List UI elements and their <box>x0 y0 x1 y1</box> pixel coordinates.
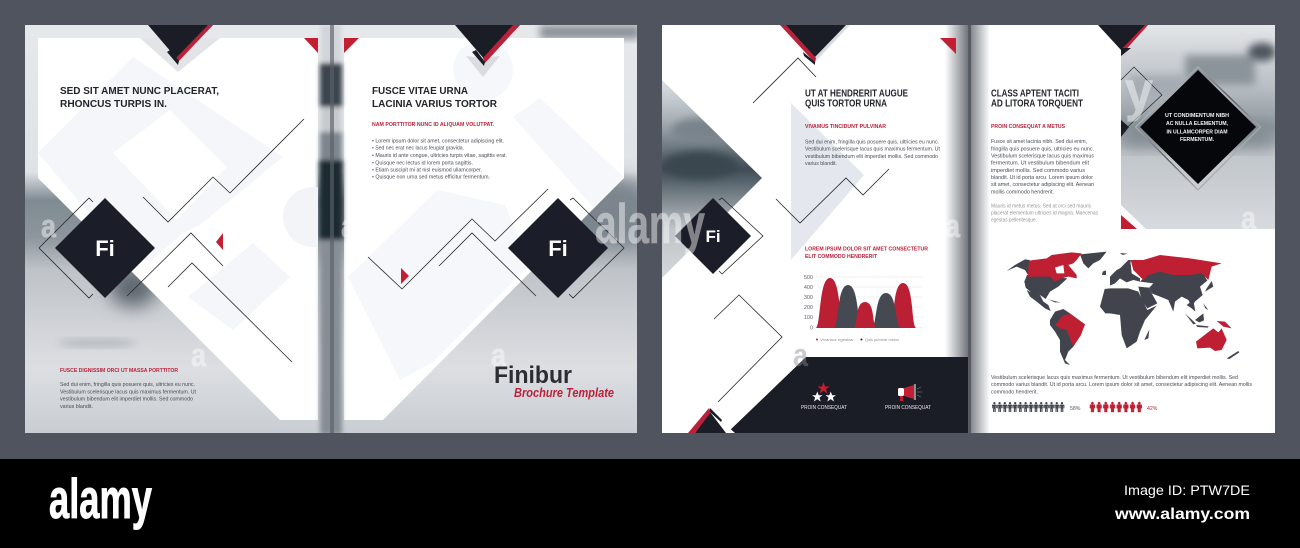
page 4 callout diamond <box>1136 67 1260 190</box>
page 1 body text <box>60 382 197 410</box>
page 3 heading <box>805 88 908 110</box>
page 3 top chevron tab <box>780 25 850 65</box>
photo edge diamond <box>1121 120 1129 137</box>
page 3 body text: varius blandit. <box>805 161 837 167</box>
page 4 small outline diamond <box>1121 67 1162 133</box>
panel: front page white sheet <box>38 38 318 420</box>
pale geometric shapes: back page <box>348 40 624 380</box>
chart title: LOREM IPSUM DOLOR SIT AMET CONSECTETUR <box>805 247 928 253</box>
page 1 small red triangle <box>216 233 223 250</box>
area chart: 0 <box>810 326 813 332</box>
panel: cover spread background photo <box>25 25 640 433</box>
watermark letters: alamy <box>595 192 705 255</box>
page 2 bullet list: • Etiam suscipit mi at nisl euismod ullamcorper. <box>372 167 482 173</box>
page 1 body text: Sed dui enim, fringilla quis posuere quis, ultricies eu nunc. <box>60 382 195 388</box>
area chart: 100 <box>804 315 813 321</box>
area chart: 200 <box>804 305 813 311</box>
page 4 callout diamond: UT CONDIMENTUM NIBH <box>1165 113 1229 119</box>
page 3 heading: UT AT HENDRERIT AUGUE <box>805 88 908 100</box>
page 4 body text: blandit. Ut id porta arcu. Lorem ipsum dolor <box>991 175 1093 181</box>
page 1 subheading: FUSCE DIGNISSIM ORCI UT MASSA PORTTITOR <box>60 368 178 374</box>
area chart: 300 <box>804 295 813 301</box>
area chart: 400 <box>804 285 813 291</box>
map: europe africa asia oceania <box>1100 253 1239 359</box>
page 4 bottom text: commodo varius blandit. Ut id porta arcu. Lorem ipsum dolor sit amet, consectetur adipiscing elit. Aenean mollis <box>991 382 1252 388</box>
page 2 heading: LACINIA VARIUS TORTOR <box>372 98 497 110</box>
page 2 top chevron tab <box>455 25 520 77</box>
icon: megaphone <box>898 384 922 401</box>
page 3 heading: QUIS TORTOR URNA <box>805 98 887 110</box>
page 4 heading <box>991 88 1083 110</box>
page 2 decorative line charts <box>368 189 548 296</box>
page 4 spine shadow <box>968 25 990 433</box>
area chart <box>804 275 923 342</box>
watermark letters: a <box>1241 200 1256 236</box>
watermark letters: a <box>793 337 808 373</box>
page 1 body text: varius blandit. <box>60 404 93 410</box>
footer logo: alamy <box>49 467 152 530</box>
page 2 bullet list: • Lorem ipsum dolor sit amet, consectetur adipiscing elit. <box>372 139 504 145</box>
page 4 body text <box>991 139 1094 195</box>
page 4 heading: CLASS APTENT TACITI <box>991 88 1079 100</box>
page 1 decorative line charts <box>127 119 304 362</box>
watermark letters: y <box>1125 59 1153 122</box>
chart legend: Vivamus egestas <box>820 338 853 342</box>
page 4 heading: AD LITORA TORQUENT <box>991 98 1083 110</box>
page 4 body text: mollis commodo hendrerit. <box>991 189 1054 195</box>
page 4 bottom text: commodo hendrerit. <box>991 389 1038 395</box>
page 4 body text: sit amet, consectetur adipiscing elit. Aenean <box>991 182 1094 188</box>
page 2 bullet list: • Quisque nec lectus id lorem porta sagittis. <box>372 160 473 166</box>
page 4 secondary text: egestas pellentesque. <box>991 218 1037 224</box>
page 2 bullet list: • Mauris id ante congue, ultricies turpis vitae, sagittis erat. <box>372 153 507 159</box>
page 4 body text: imperdiet mollis. Sed commodo varius <box>991 168 1085 174</box>
pictogram: 42 percent <box>1090 402 1158 412</box>
page 4 secondary text <box>991 203 1098 224</box>
page 2 small red triangle <box>401 268 409 284</box>
page 4 top chevron tab <box>1098 25 1148 56</box>
page 1 top chevron tab <box>140 25 220 72</box>
area chart: 500 <box>804 275 813 281</box>
footer bar <box>0 459 1300 548</box>
page 3 pale triangle <box>791 103 864 260</box>
icon label: PROIN CONSEQUAT <box>801 405 848 411</box>
page 3 spine shadow <box>945 25 968 433</box>
page 4 bottom text: Vestibulum scelerisque lacus quis maximus fermentum. Ut vestibulum bibendum elit imperdiet mollis. Sed <box>991 375 1238 381</box>
page 3 subheading: VIVAMUS TINCIDUNT PULVINAR <box>805 124 886 130</box>
page 2 logo diamond: Fi <box>548 236 568 261</box>
pictogram: 42 percent: 42% <box>1147 406 1158 412</box>
chart legend: Quis pulvinar metus <box>865 338 899 342</box>
page 4 photo <box>1121 25 1276 229</box>
page 3 bottom dark banner <box>727 357 968 433</box>
page 3 corner red triangle <box>940 38 956 54</box>
pictogram: 58 percent <box>992 402 1081 412</box>
page 4 subheading: PROIN CONSEQUAT A METUS <box>991 124 1065 130</box>
watermark letters: a <box>341 208 356 244</box>
page 4 bottom text <box>991 375 1252 395</box>
page 4 secondary text: placerat elementum ultricies id magna. Maecenas <box>991 211 1098 217</box>
page 4 body text: Vestibulum scelerisque lacus quis maximus <box>991 153 1094 159</box>
page 3 body text <box>805 139 941 167</box>
icon: three stars <box>812 382 836 402</box>
page 4 body text: Fusce sit amet lacinia nibh. Sed dui enim, <box>991 139 1087 145</box>
icon label: PROIN CONSEQUAT <box>885 405 932 411</box>
page 1 heading: SED SIT AMET NUNC PLACERAT, <box>60 85 219 97</box>
chart title: ELIT COMMODO HENDRERIT <box>805 254 878 260</box>
page 2 bullet list <box>372 139 507 180</box>
watermark letters: a <box>41 208 56 244</box>
page 3 decorative line charts <box>714 58 889 402</box>
page 1 logo diamond <box>39 198 155 298</box>
website: www.alamy.com <box>1114 506 1250 523</box>
pictogram: 58 percent: 58% <box>1070 406 1081 412</box>
page 4 callout diamond: AC NULLA ELEMENTUM, <box>1166 121 1228 127</box>
page 3 logo diamond <box>675 198 763 274</box>
page 3 bottom corner tab <box>688 408 735 433</box>
watermark letters: a <box>491 337 506 373</box>
world map <box>1007 252 1239 365</box>
page 2 heading: FUSCE VITAE URNA <box>372 85 468 97</box>
page 3 logo diamond: Fi <box>705 227 721 246</box>
page 4 body text: fermentum. Ut vestibulum bibendum elit <box>991 161 1090 167</box>
page 1 heading <box>60 85 219 110</box>
page 2 heading <box>372 85 497 110</box>
page 2 subheading: NAM PORTTITOR NUNC ID ALIQUAM VOLUTPAT. <box>372 122 494 128</box>
page 4 callout diamond: FERMENTUM. <box>1180 137 1214 143</box>
book spine <box>319 25 343 435</box>
page 3 body text: Vestibulum scelerisque lacus quis maximus fermentum. Ut <box>805 147 941 153</box>
chart legend <box>816 338 899 342</box>
page 2 logo diamond <box>508 198 624 298</box>
brand title: Brochure Template <box>514 385 614 400</box>
map: americas <box>1007 252 1107 365</box>
chart title <box>805 247 928 260</box>
pale geometric shapes: front page <box>38 57 343 330</box>
brand title: Finibur <box>494 362 572 389</box>
page 4 callout diamond: IN ULLAMCORPER DIAM <box>1166 129 1228 135</box>
watermark letters <box>41 59 1256 373</box>
page 1 corner red triangle <box>304 38 318 53</box>
brand title <box>494 362 614 400</box>
watermark letters: a <box>945 208 960 244</box>
page 3 photo triangle <box>662 80 762 278</box>
image id: Image ID: PTW7DE <box>1124 482 1250 498</box>
page 3 body text: vestibulum bibendum elit imperdiet mollis. Sed commodo <box>805 154 938 160</box>
page 4 body text: fringilla quis posuere quis, ultricies eu nunc. <box>991 146 1094 152</box>
panel: back page white sheet <box>344 38 624 420</box>
page 2 bullet list: • Sed nec erat nec lacus feugiat gravida. <box>372 146 464 152</box>
page 1 logo diamond: Fi <box>95 236 115 261</box>
page 4 secondary text: Mauris id metus metus. Sed at orci sed mauris <box>991 203 1091 209</box>
page 2 bullet list: • Quisque non urna sed metus efficitur fermentum. <box>372 174 490 180</box>
page 3 body text: Sed dui enim, fringilla quis posuere quis, ultricies eu nunc. <box>805 139 939 145</box>
page 1 body text: Vestibulum scelerisque lacus quis maximus fermentum. Ut <box>60 390 197 396</box>
page 4 small red triangle <box>1121 215 1137 229</box>
panel: inner left page <box>662 25 968 433</box>
panel: inner right page <box>971 25 1275 433</box>
page 1 heading: RHONCUS TURPIS IN. <box>60 98 167 110</box>
page 2 corner red triangle <box>344 38 359 53</box>
watermark letters: a <box>191 337 206 373</box>
page 1 body text: vestibulum bibendum elit imperdiet mollis. Sed commodo <box>60 396 193 402</box>
